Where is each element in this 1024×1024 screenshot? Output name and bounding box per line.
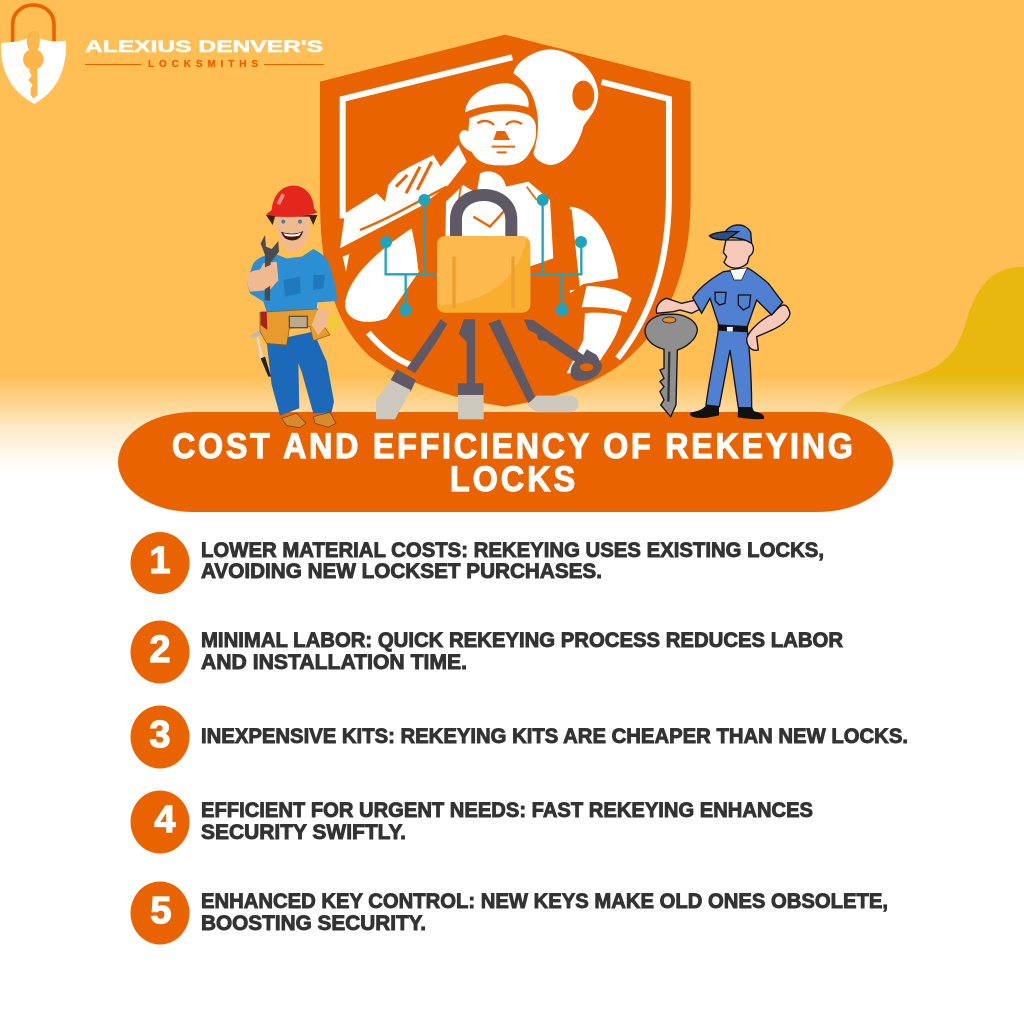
helmet: [266, 186, 317, 217]
text 4: EFFICIENT FOR URGENT NEEDS: FAST REKEYING ENHANCES: [201, 799, 813, 822]
text 5: BOOSTING SECURITY.: [201, 912, 426, 935]
number badge 3: 3: [149, 714, 171, 756]
pants: [267, 332, 334, 416]
hair: [266, 215, 317, 225]
arm on hip: [747, 305, 790, 350]
shirt: [693, 268, 783, 327]
number badge 1: [130, 532, 190, 594]
banner shape: [118, 412, 893, 512]
hammer: [249, 330, 262, 338]
boots: [282, 412, 336, 428]
number badge 5: 5: [150, 890, 172, 932]
title banner: [118, 412, 893, 512]
tool belt: [260, 309, 330, 345]
list item 1: [130, 532, 824, 594]
padlock: [456, 195, 511, 238]
locksmith with giant key: [645, 225, 790, 418]
giant key: [645, 314, 697, 417]
text 1: LOWER MATERIAL COSTS: REKEYING USES EXISTING LOCKS,: [201, 539, 824, 562]
list item 4: [130, 790, 813, 854]
trousers: [706, 330, 752, 408]
list item 5: [130, 882, 888, 944]
number badge 3: [130, 706, 190, 768]
text 4: [201, 799, 813, 844]
cap: [725, 225, 752, 243]
text 2: AND INSTALLATION TIME.: [201, 651, 467, 674]
text 4: SECURITY SWIFTLY.: [201, 821, 406, 844]
list item 2: [130, 620, 843, 684]
locksmith with hard hat and wrench: [247, 186, 340, 428]
number badge 2: 2: [149, 629, 171, 671]
banner title: COST AND EFFICIENCY OF REKEYING: [172, 428, 853, 466]
text 5: [201, 890, 888, 935]
text 5: ENHANCED KEY CONTROL: NEW KEYS MAKE OLD ONES OBSOLETE,: [201, 890, 888, 913]
shirt: [247, 249, 337, 312]
text 2: MINIMAL LABOR: QUICK REKEYING PROCESS REDUCES LABOR: [201, 629, 843, 652]
logo: [1, 5, 324, 104]
shield shape: [320, 35, 691, 407]
text 2: [201, 629, 843, 674]
text 1: AVOIDING NEW LOCKSET PURCHASES.: [201, 560, 602, 583]
gloves: [327, 315, 340, 333]
shield inner outline: [343, 57, 669, 365]
hands: [312, 310, 330, 335]
shield emblem: [320, 35, 691, 419]
tool: chisel: [458, 319, 484, 419]
banner title: LOCKS: [450, 461, 575, 499]
figure details: [360, 121, 573, 290]
logo tagline: LOCKSMITHS: [148, 59, 258, 70]
text 3: INEXPENSIVE KITS: REKEYING KITS ARE CHEAPER THAN NEW LOCKS.: [201, 725, 908, 748]
tool: screwdriver: [376, 319, 447, 419]
head: [723, 240, 753, 268]
locksmith figure: [340, 49, 632, 373]
logo icon: padlock shield: [1, 5, 66, 104]
neck collar: [730, 268, 747, 280]
arm on key: [656, 298, 705, 313]
number badge 2: [130, 620, 190, 684]
logo name: ALEXIUS DENVER'S: [85, 37, 323, 56]
number badge 1: 1: [149, 540, 171, 582]
tool: file: [488, 319, 578, 412]
belt: [718, 325, 747, 332]
circuit lines: [386, 200, 581, 310]
number badge 5: [130, 882, 190, 944]
number badge 4: 4: [154, 799, 176, 841]
face: [274, 217, 311, 251]
nose: [493, 131, 510, 140]
list item 3: [130, 706, 908, 768]
number badge 4: [130, 790, 190, 854]
text 1: [201, 539, 824, 583]
wrench: [261, 235, 279, 301]
shoes: [691, 406, 763, 418]
tool: key wrench: [524, 319, 602, 381]
banner title: [172, 428, 853, 499]
